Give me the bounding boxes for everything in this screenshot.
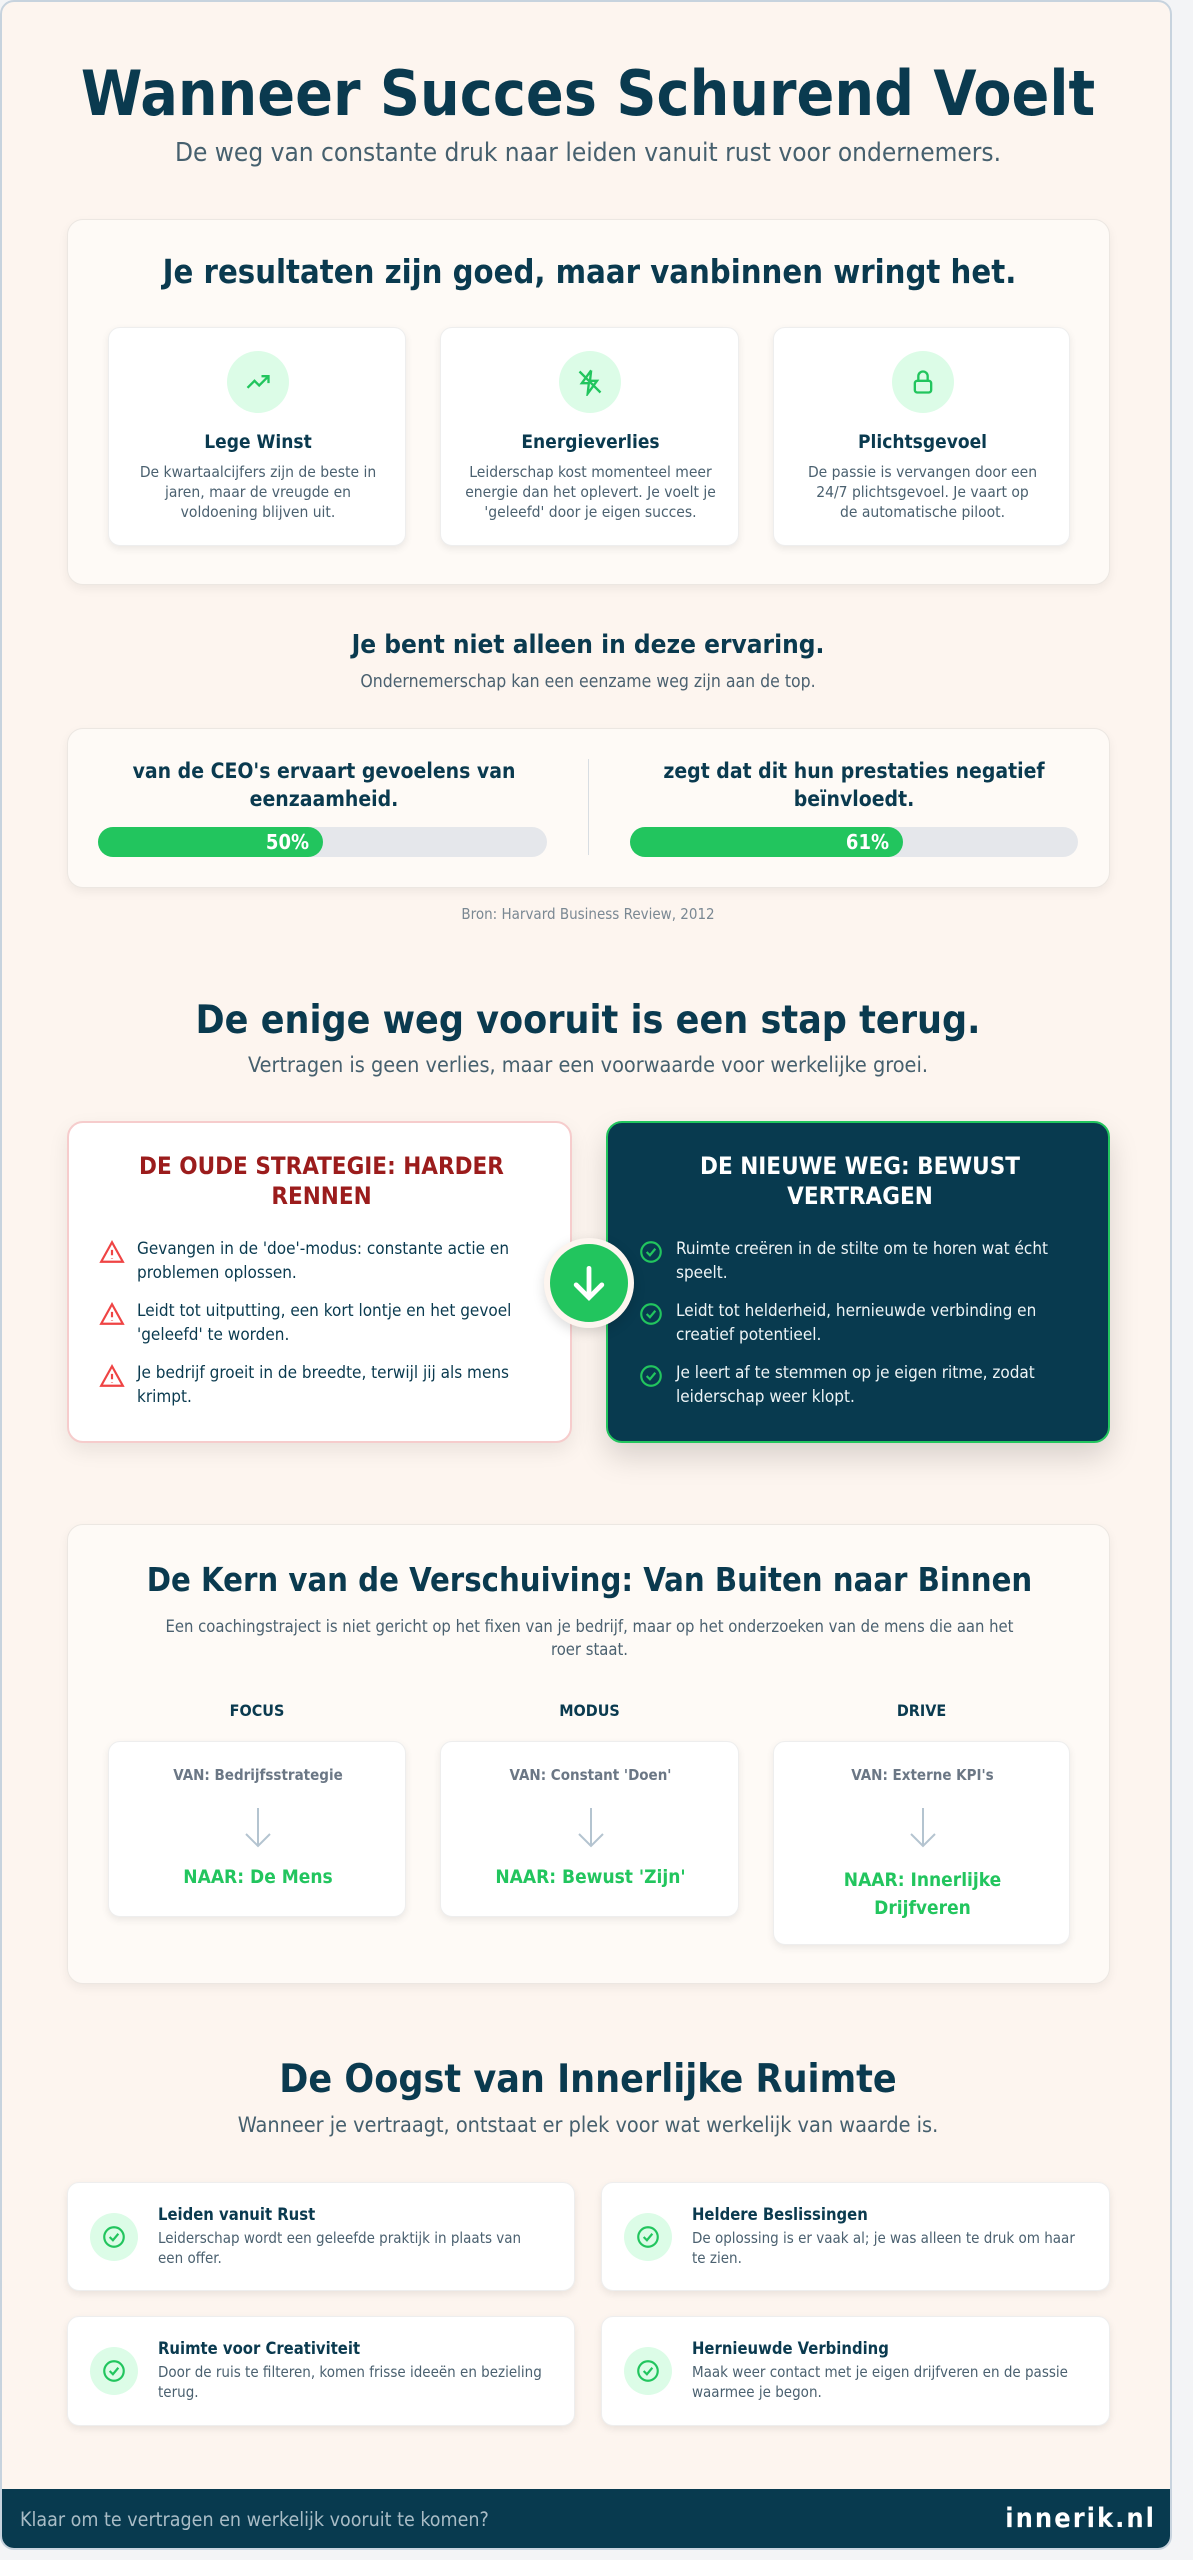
stat: 61% (630, 759, 1078, 857)
card: Hernieuwde Verbinding: Hernieuwde Verbinding (692, 2339, 889, 2358)
card: Heldere Beslissingen (601, 2182, 1110, 2291)
column: drive: NAAR: Innerlijke Drijfveren (844, 1869, 1001, 1919)
column: modus (440, 1701, 740, 1920)
column: focus: NAAR: De Mens (183, 1866, 333, 1888)
card: Lege Winst: Lege Winst (204, 431, 312, 453)
panel: kern (67, 1524, 1110, 1984)
heading: symptoms: Je resultaten zijn goed, maar vanbinnen wringt het. (163, 253, 1016, 291)
footer (2, 2489, 1174, 2552)
card: Heldere Beslissingen: De oplossing is er vaak al; je was alleen te druk om haar te zien. (692, 2229, 1075, 2267)
icon: arrow down circle (544, 1238, 634, 1328)
bar chart: 50%: 50% (266, 830, 309, 854)
icon: check (624, 2213, 672, 2261)
list: warnings (99, 1239, 511, 1407)
arrow (578, 1808, 604, 1848)
column: focus: VAN: Bedrijfsstrategie (173, 1766, 343, 1784)
icon: check (90, 2347, 138, 2395)
heading: oogst: De Oogst van Innerlijke Ruimte (279, 2057, 897, 2102)
column: drive: VAN: Externe KPI's (851, 1766, 994, 1784)
card: Plichtsgevoel: Plichtsgevoel (858, 431, 987, 453)
source: Bron: Harvard Business Review, 2012 (461, 905, 715, 923)
heading: kern: De Kern van de Verschuiving: Van Buiten naar Binnen (147, 1561, 1032, 1599)
heading: oude strategie: DE OUDE STRATEGIE: HARDER RENNEN (139, 1152, 504, 1210)
panel: symptoms (67, 219, 1110, 585)
column: drive: DRIVE (897, 1701, 946, 1720)
icon: lock (892, 351, 954, 413)
subheading: stap terug: Vertragen is geen verlies, maar een voorwaarde voor werkelijke groei. (248, 1053, 928, 1078)
heading: stap terug: De enige weg vooruit is een stap terug. (196, 998, 980, 1043)
column: focus: FOCUS (230, 1701, 284, 1720)
icon: trending up (227, 351, 289, 413)
column: drive (772, 1701, 1070, 1948)
card: Hernieuwde Verbinding: Maak weer contact met je eigen drijfveren en de passie waarmee je begon. (692, 2363, 1068, 2401)
stat: 50% (98, 759, 547, 857)
card: Ruimte voor Creativiteit: Door de ruis te filteren, komen frisse ideeën en bezieling terug. (158, 2363, 542, 2401)
card: Heldere Beslissingen: Heldere Beslissingen (692, 2205, 868, 2224)
panel: stats (67, 728, 1110, 888)
heading: niet alleen: Je bent niet alleen in deze ervaring. (352, 630, 824, 660)
subheading: oogst: Wanneer je vertraagt, ontstaat er plek voor wat werkelijk van waarde is. (238, 2113, 938, 2138)
card: Energieverlies: Leiderschap kost momenteel meer energie dan het oplevert. Je voelt je 'geleefd' door je eigen succes. (465, 463, 716, 521)
icon: check (90, 2213, 138, 2261)
icon: zap off (559, 351, 621, 413)
panel: oude strategie (67, 1121, 572, 1443)
item: warning 1: Gevangen in de 'doe'-modus: constante actie en problemen oplossen. (137, 1239, 509, 1283)
heading: nieuwe weg: DE NIEUWE WEG: BEWUST VERTRAGEN (700, 1152, 1020, 1210)
column: modus: VAN: Constant 'Doen' (510, 1766, 671, 1784)
footer: cta: Klaar om te vertragen en werkelijk vooruit te komen? (20, 2508, 489, 2531)
card: Leiden vanuit Rust: Leiden vanuit Rust (158, 2205, 315, 2224)
card: Energieverlies (440, 327, 739, 546)
item: check 2: Leidt tot helderheid, hernieuwde verbinding en creatief potentieel. (676, 1301, 1036, 1345)
arrow (245, 1808, 271, 1848)
card: Leiden vanuit Rust (67, 2182, 575, 2291)
item: check 3: Je leert af te stemmen op je eigen ritme, zodat leiderschap weer klopt. (676, 1363, 1035, 1407)
card: Lege Winst: De kwartaalcijfers zijn de beste in jaren, maar de vreugde en voldoening blijven uit. (140, 463, 376, 521)
column: modus: MODUS (559, 1701, 620, 1720)
stat: 61%: zegt dat dit hun prestaties negatief beïnvloedt. (663, 759, 1045, 811)
item: check 1: Ruimte creëren in de stilte om te horen wat écht speelt. (676, 1239, 1048, 1283)
list: checks (640, 1239, 1048, 1407)
column: modus: NAAR: Bewust 'Zijn' (495, 1866, 686, 1888)
text: kern intro: Een coachingstraject is niet gericht op het fixen van je bedrijf, maar op het onderzoeken van de mens die aan het roer staat. (165, 1617, 1014, 1659)
card: Lege Winst (108, 327, 406, 546)
icon: check (624, 2347, 672, 2395)
card: Plichtsgevoel (773, 327, 1070, 546)
footer: logo: innerik.nl (1005, 2503, 1156, 2534)
item: warning 3: Je bedrijf groeit in de breedte, terwijl jij als mens krimpt. (137, 1363, 509, 1407)
item: warning 2: Leidt tot uitputting, een kort lontje en het gevoel 'geleefd' te worden. (137, 1301, 511, 1345)
card: Hernieuwde Verbinding (601, 2316, 1110, 2426)
stat: 50%: van de CEO's ervaart gevoelens van eenzaamheid. (133, 759, 515, 811)
subheading: niet alleen: Ondernemerschap kan een eenzame weg zijn aan de top. (360, 672, 816, 692)
card: Ruimte voor Creativiteit (67, 2316, 575, 2426)
subtitle: De weg van constante druk naar leiden vanuit rust voor ondernemers. (175, 138, 1001, 168)
bar chart: 61% (630, 827, 1078, 857)
title: Wanneer Succes Schurend Voelt (81, 57, 1095, 130)
arrow (910, 1808, 936, 1848)
card: Ruimte voor Creativiteit: Ruimte voor Creativiteit (158, 2339, 360, 2358)
column: focus (108, 1701, 406, 1920)
card: Plichtsgevoel: De passie is vervangen door een 24/7 plichtsgevoel. Je vaart op de automatische piloot. (808, 463, 1037, 521)
card: Leiden vanuit Rust: Leiderschap wordt een geleefde praktijk in plaats van een offer. (158, 2229, 521, 2267)
bar chart: 61%: 61% (846, 830, 889, 854)
card: Energieverlies: Energieverlies (521, 431, 660, 453)
bar chart: 50% (98, 827, 547, 857)
panel: nieuwe weg (606, 1121, 1110, 1443)
